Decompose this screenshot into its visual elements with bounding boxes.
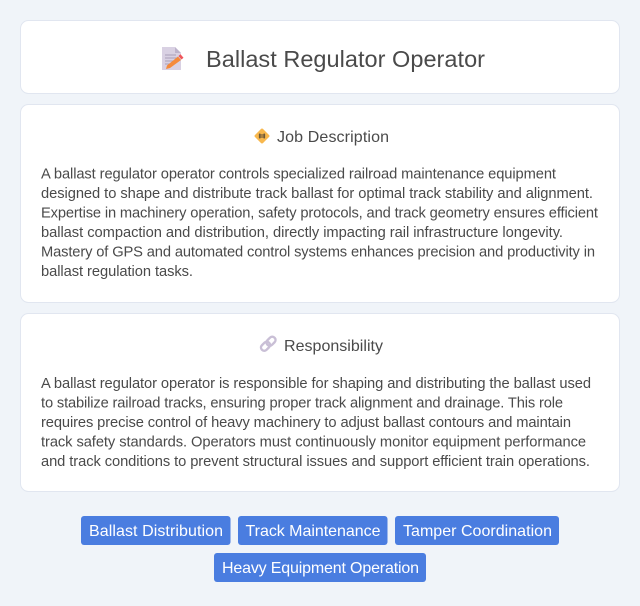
text: responsibility body: requires precise control of heavy machinery to adjust ballast contours and maintain — [41, 415, 571, 431]
text: job description body: ballast regulation tasks. — [41, 264, 193, 280]
text: responsibility body — [41, 376, 591, 470]
heading: responsibility: Responsibility — [284, 338, 383, 355]
heading: job description: Job Description — [277, 129, 389, 146]
text: job description body: Mastery of GPS and automated control systems enhances precision and productivity in — [41, 244, 595, 260]
text: job description body: designed to shape and distribute track ballast for optimal track stability and alignment. — [41, 186, 593, 202]
panel: job description — [20, 104, 620, 302]
text: job description body: Expertise in machinery operation, safety protocols, and track geometry ensures efficient — [41, 206, 598, 222]
title: Ballast Regulator Operator — [206, 46, 485, 72]
tag: ballast distribution: Ballast Distribution — [89, 523, 223, 540]
tag: tamper coordination — [395, 516, 559, 545]
text: job description body: ballast compaction and distribution, directly impacting rail infrastructure longevity. — [41, 225, 563, 241]
tag: track maintenance — [238, 516, 388, 545]
text: responsibility body: track safety standards. Operators must continuously monitor equipment performance — [41, 434, 586, 450]
text: job description body: A ballast regulator operator controls specialized railroad maintenance equipment — [41, 166, 556, 182]
tag: ballast distribution — [81, 516, 230, 545]
tag: track maintenance: Track Maintenance — [246, 523, 381, 540]
icon: chain link — [260, 335, 277, 352]
text: responsibility body: A ballast regulator operator is responsible for shaping and distributing the ballast used — [41, 376, 591, 392]
text: responsibility body: and track conditions to prevent structural issues and support efficient train operations. — [41, 454, 590, 470]
icon: railroad warning diamond — [254, 128, 270, 144]
text: job description body — [41, 166, 598, 280]
tag: tamper coordination: Tamper Coordination — [403, 523, 552, 540]
tag: heavy equipment operation: Heavy Equipment Operation — [222, 560, 419, 577]
panel: header — [20, 20, 620, 94]
panel: responsibility — [20, 314, 620, 492]
text: responsibility body: to stabilize railroad tracks, ensuring proper track alignment and drainage. This role — [41, 396, 563, 412]
icon: document with pencil — [162, 47, 184, 70]
tag: heavy equipment operation — [214, 553, 426, 582]
